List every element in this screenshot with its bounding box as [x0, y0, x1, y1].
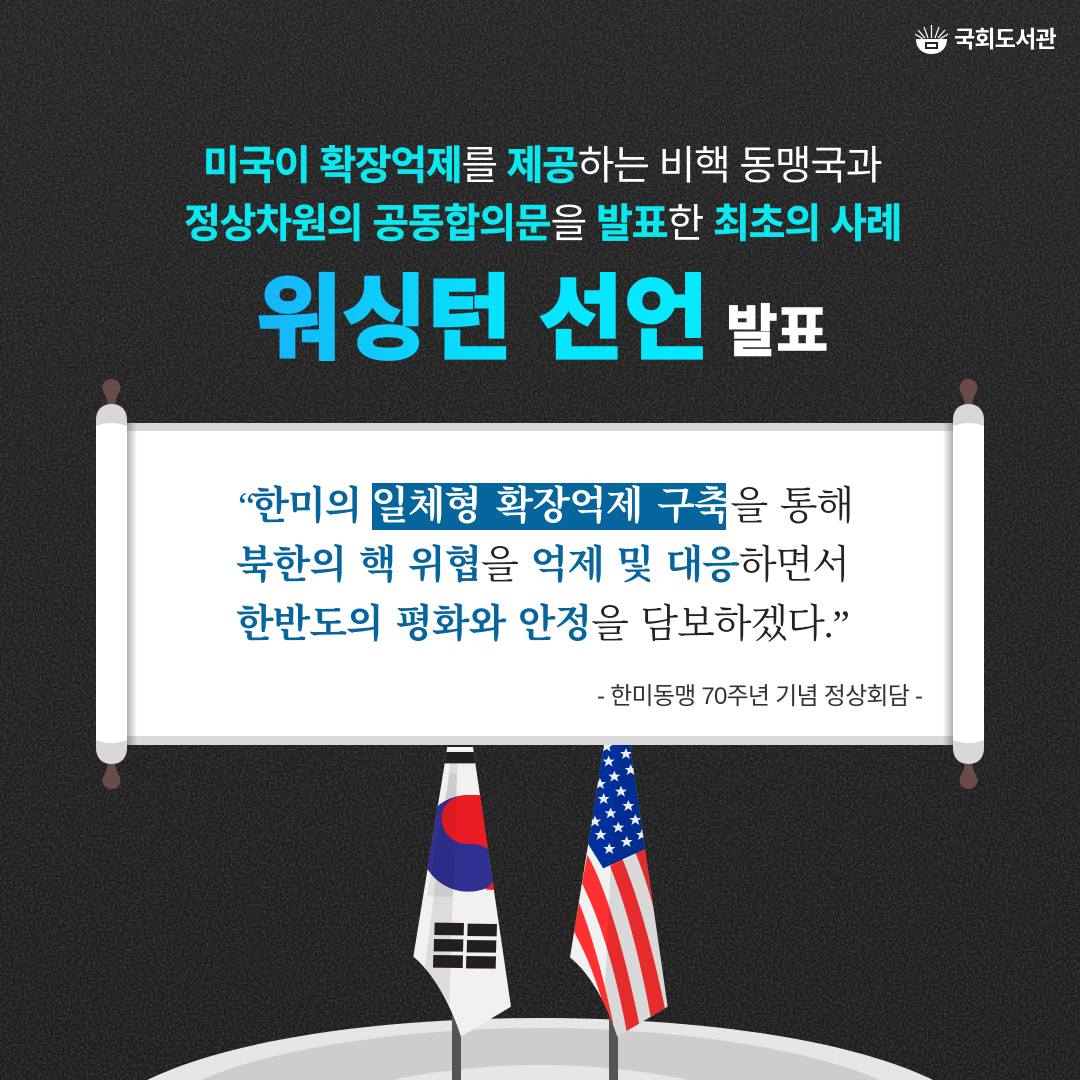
flag: USA — [567, 741, 670, 1040]
main title: 워싱턴 선언 — [257, 269, 709, 371]
quote line 1: “한미의 일체형 확장억제 구축을 통해 — [238, 485, 853, 528]
left roller — [96, 379, 127, 789]
right roller — [953, 379, 984, 789]
highlight box — [372, 483, 726, 530]
quote line 3: 한반도의 평화와 안정을 담보하겠다.” — [236, 603, 849, 646]
icon: library emblem — [915, 25, 948, 54]
heading line 2: 정상차원의 공동합의문을 발표한 최초의 사례 — [184, 202, 901, 246]
flag: South Korea — [410, 743, 517, 1040]
quote line 2: 북한의 핵 위협을 억제 및 대응하면서 — [236, 544, 849, 587]
main title suffix: 발표 — [726, 300, 827, 363]
flag pole: USA — [609, 1000, 618, 1080]
scroll banner — [96, 379, 984, 789]
paper shadows — [127, 423, 137, 745]
scroll paper — [127, 423, 953, 745]
podium — [147, 745, 933, 1080]
heading line 1: 미국이 확장억제를 제공하는 비핵 동맹국과 — [203, 144, 881, 188]
logo: National Assembly Library — [915, 25, 1056, 54]
quote source: - 한미동맹 70주년 기념 정상회담 - — [597, 683, 922, 710]
logo text: 국회도서관 — [954, 26, 1056, 52]
flag pole: Korea — [452, 1000, 461, 1080]
